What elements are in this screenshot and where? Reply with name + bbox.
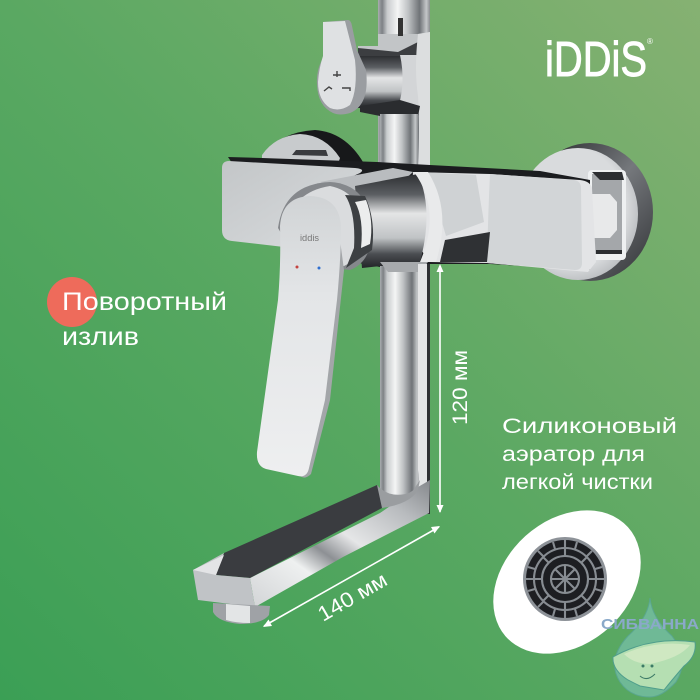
diverter body bbox=[356, 18, 430, 168]
main handle lever bbox=[257, 196, 344, 478]
spout joint bbox=[377, 480, 420, 508]
feature label: swivel spout bbox=[47, 277, 227, 351]
left wall flange bbox=[262, 130, 363, 170]
watermark drop bbox=[615, 598, 682, 697]
feature label: swivel spout: излив bbox=[62, 323, 139, 351]
dimension: 120 mm: 120 мм bbox=[449, 350, 472, 425]
body dark band bbox=[228, 157, 590, 270]
lower pipe bbox=[380, 262, 430, 515]
right body plate bbox=[412, 172, 596, 272]
watermark face bbox=[640, 664, 655, 679]
left body plate bbox=[222, 161, 362, 247]
logo: ® bbox=[647, 37, 653, 46]
watermark tub bbox=[613, 641, 695, 690]
watermark name: СИБВАННА bbox=[601, 616, 699, 633]
faucet illustration bbox=[193, 0, 653, 624]
lever symbols bbox=[324, 71, 350, 91]
red accent circle bbox=[47, 277, 97, 327]
hot indicator bbox=[296, 266, 298, 268]
spout bbox=[193, 480, 430, 624]
spout dark top bbox=[216, 485, 386, 578]
right wall flange bbox=[518, 143, 653, 281]
spout end bbox=[193, 553, 255, 607]
feature label: swivel spout: Поворотный bbox=[62, 288, 227, 316]
watermark bbox=[601, 598, 699, 697]
upper shower pipe bbox=[378, 0, 430, 168]
dimension: 120 mm bbox=[436, 264, 472, 513]
mixer cylinder bbox=[320, 168, 442, 268]
spout side face bbox=[250, 480, 430, 607]
aerator bbox=[465, 481, 669, 683]
feature text: silicone aerator: Силиконовый bbox=[502, 415, 677, 438]
handle logo: iddis bbox=[300, 233, 320, 243]
spout nozzle bbox=[213, 603, 270, 624]
feature text: silicone aerator bbox=[502, 415, 677, 494]
diverter lever bbox=[317, 20, 367, 114]
feature text: silicone aerator: легкой чистки bbox=[502, 471, 653, 494]
feature text: silicone aerator: аэратор для bbox=[502, 443, 645, 466]
cold indicator bbox=[318, 266, 320, 270]
handle collar bbox=[278, 182, 373, 270]
dimension: 140 mm: 140 мм bbox=[314, 568, 391, 626]
dimension: 140 mm bbox=[263, 526, 440, 627]
logo: iDDiS bbox=[545, 33, 647, 87]
